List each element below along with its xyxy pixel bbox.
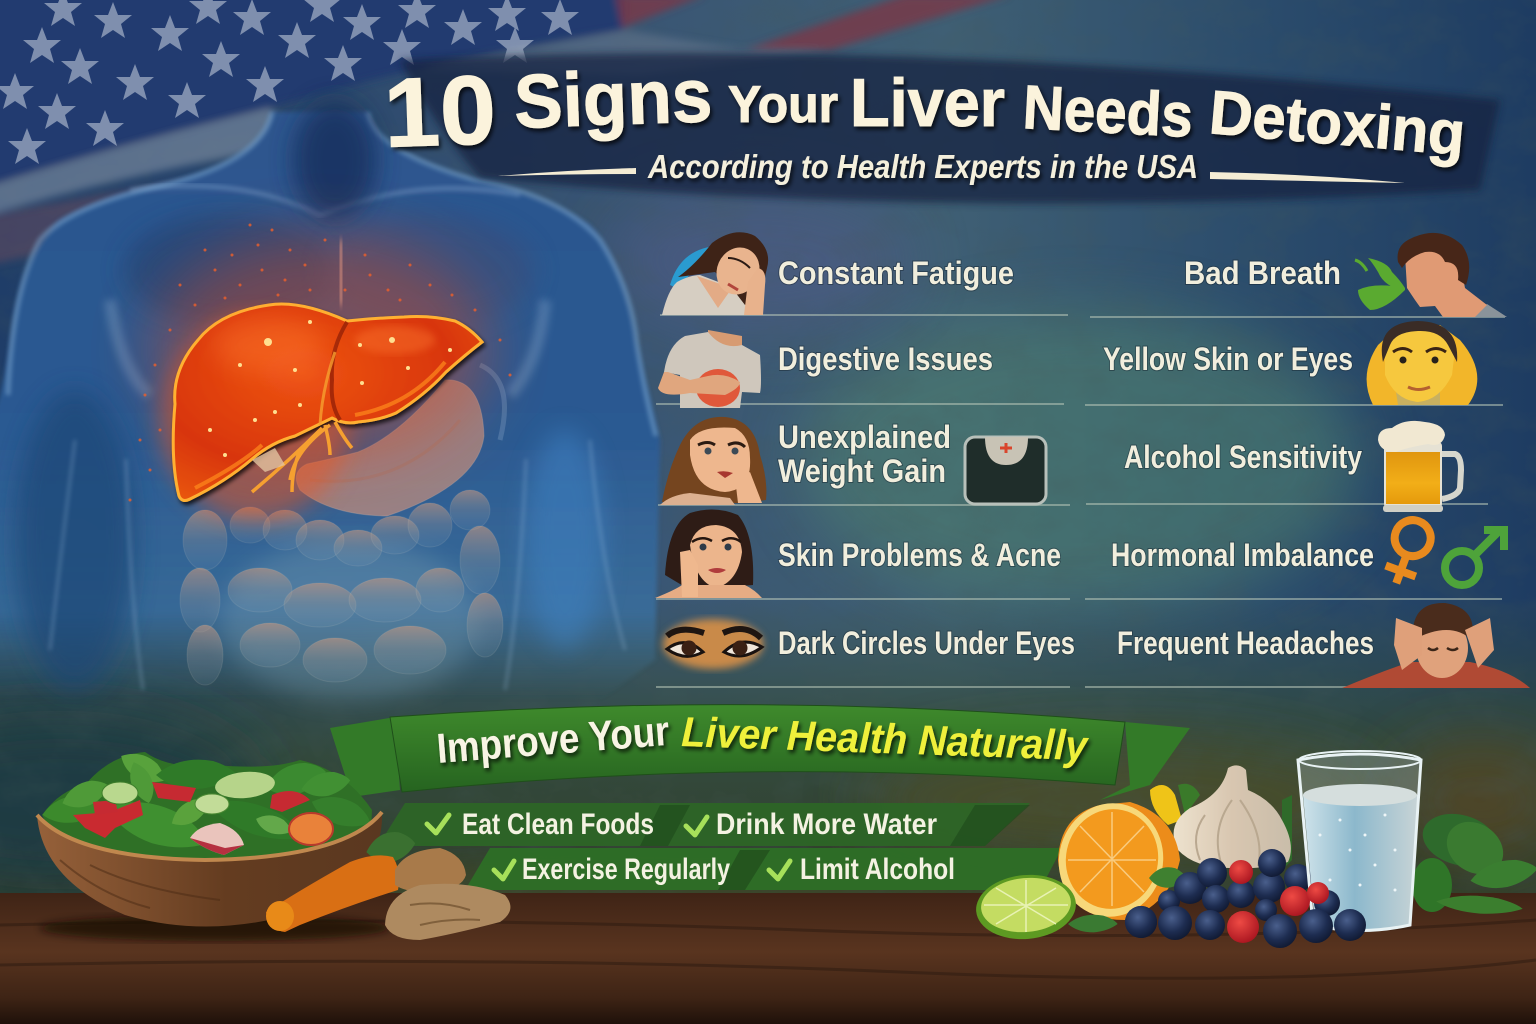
human torso silhouette (0, 100, 660, 700)
internal organs: intestines and stomach (180, 365, 504, 685)
garlic (1174, 765, 1291, 868)
sign 2: digestive issues: Digestive Issues (778, 341, 993, 377)
sign 1: constant fatigue (662, 232, 1014, 315)
tip: eat clean foods: Eat Clean Foods (462, 808, 654, 841)
sign 10: frequent headaches (1117, 603, 1530, 688)
banner heading (435, 707, 1091, 772)
front berries (1125, 860, 1366, 948)
sign 3: unexplained weight gain (660, 417, 951, 505)
sign 4: skin problems and acne: Skin Problems & Acne (778, 537, 1061, 573)
sign 1: constant fatigue: Constant Fatigue (778, 255, 1014, 291)
sign 5: dark circles: Dark Circles Under Eyes (778, 625, 1075, 661)
tip: limit alcohol: Limit Alcohol (800, 853, 955, 886)
title: Needs (1021, 73, 1195, 151)
blueberries and raspberries (1125, 849, 1312, 938)
sign 7: yellow skin or eyes: Yellow Skin or Eyes (1103, 341, 1353, 377)
turmeric and ginger (266, 828, 510, 940)
title: Detoxing (1207, 78, 1468, 169)
tip: drink more water: Drink More Water (716, 808, 937, 841)
sign 5: dark circles (663, 619, 1075, 669)
title: Liver (850, 65, 1005, 141)
subtitle: According to Health Experts in the USA (647, 148, 1198, 185)
sign 8: alcohol sensitivity: Alcohol Sensitivity (1124, 439, 1362, 475)
sign 6: bad breath: Bad Breath (1184, 255, 1341, 291)
sign 9: hormonal imbalance: Hormonal Imbalance (1111, 537, 1374, 573)
banner ribbon (330, 705, 1190, 800)
title: Signs (513, 53, 713, 145)
orange and lime (973, 793, 1180, 943)
banner heading: Liver Health Naturally (681, 708, 1091, 769)
subtitle (498, 148, 1405, 185)
sign 4: skin problems and acne (655, 509, 1061, 598)
icon: bathroom scale (965, 437, 1046, 504)
banner heading: Improve Your (435, 707, 671, 772)
liver with glow (128, 224, 512, 520)
sign 8: alcohol sensitivity (1124, 421, 1461, 512)
title: 10 (382, 54, 498, 168)
title (382, 53, 1468, 169)
sign 9: hormonal imbalance (1111, 515, 1504, 589)
american flag backdrop (0, 0, 1010, 265)
title: Your (728, 76, 838, 134)
tip: exercise regularly: Exercise Regularly (522, 853, 730, 886)
sign 2: digestive issues (658, 330, 993, 408)
sign 6: bad breath (1184, 233, 1507, 317)
fruits and greens (1150, 784, 1536, 917)
sign 3: unexplained weight gain: Unexplained (778, 419, 951, 455)
tips bars (378, 803, 1062, 890)
sign 3: unexplained weight gain: Weight Gain (778, 453, 946, 489)
sign 10: frequent headaches: Frequent Headaches (1117, 625, 1374, 661)
salad bowl (37, 745, 390, 941)
title band (400, 53, 1500, 203)
row dividers (656, 315, 1505, 687)
table (0, 893, 1536, 1024)
sign 7: yellow skin or eyes (1103, 321, 1477, 405)
glass of water (1298, 751, 1421, 930)
